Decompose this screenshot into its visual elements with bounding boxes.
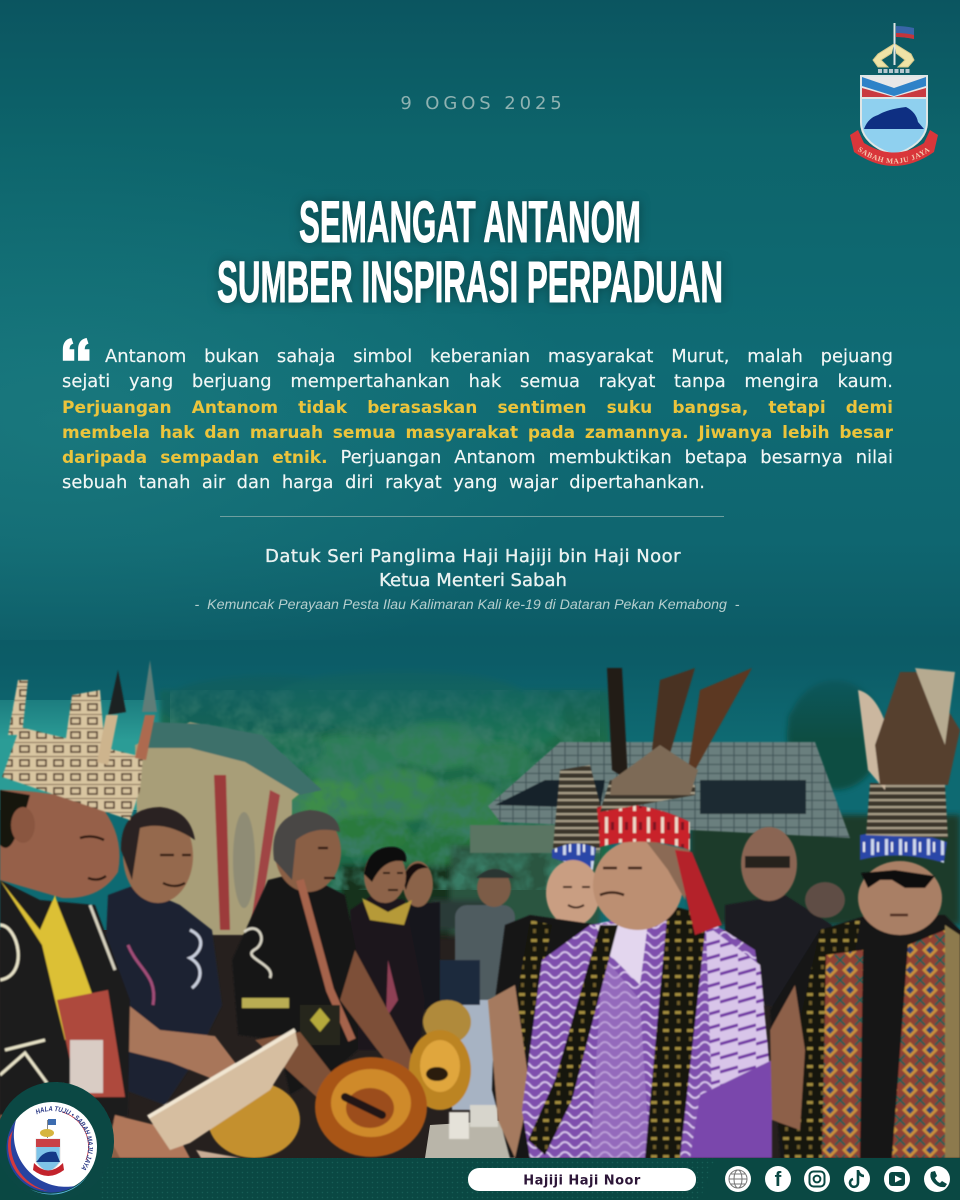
attribution: Ketua Menteri Sabah (379, 570, 567, 591)
quote text (62, 346, 893, 493)
social icons (725, 1166, 950, 1192)
gold gong right (409, 1030, 471, 1110)
icon: facebook: f (775, 1169, 782, 1191)
flag (894, 23, 914, 65)
attribution: - Kemuncak Perayaan Pesta Ilau Kalimaran Kali ke-19 di Dataran Pekan Kemabong - (195, 597, 739, 613)
Sabah crest (850, 23, 938, 166)
bald man in shades (725, 827, 832, 1010)
musician one with woven crown (0, 790, 190, 1158)
name pill: Hajiji Haji Noor (523, 1174, 641, 1188)
background glow (0, 0, 960, 640)
musician two (105, 807, 237, 1105)
wreath (878, 69, 910, 73)
people on the right (488, 668, 960, 1158)
icon: phone (924, 1166, 950, 1192)
attribution (195, 546, 740, 613)
right man with feather headdress (770, 668, 960, 1158)
big orange gong (315, 1057, 427, 1157)
icon: youtube (884, 1166, 910, 1192)
leafy mottling (170, 690, 600, 890)
musician five (398, 861, 440, 1010)
quote text: membela hak dan maruah semua masyarakat pada zamannya. Jiwanya lebih besar (62, 423, 893, 443)
chief minister (522, 668, 772, 1158)
date: 9 OGOS 2025 (400, 93, 566, 114)
icon: globe (725, 1166, 751, 1192)
woven crown (2, 660, 157, 820)
circular emblem badge (0, 1082, 114, 1194)
rear gong under basket (208, 1082, 300, 1158)
musician three (232, 810, 420, 1105)
quote text: sejati yang berjuang mempertahankan hak semua rakyat tanpa mengira kaum. (62, 371, 893, 392)
icon: tiktok (844, 1166, 870, 1192)
tent behind the musicians (135, 722, 322, 935)
woven tray (148, 1030, 298, 1158)
footer bar (0, 1158, 960, 1200)
quote text: sebuah tanah air dan harga diri rakyat yang wajar dipertahankan. (62, 472, 705, 493)
quote mark (62, 338, 90, 361)
motto ribbon: SABAH MAJU JAYA (858, 147, 930, 164)
motto ribbon (850, 130, 938, 166)
photographer at back (440, 869, 515, 1139)
badge crest (33, 1119, 64, 1176)
fade of photo into the teal background (0, 640, 960, 740)
shield (861, 76, 927, 155)
man background (805, 882, 845, 918)
title (215, 190, 726, 315)
quote text: Antanom bukan sahaja simbol keberanian masyarakat Murut, malah pejuang (105, 346, 893, 367)
musician four (350, 847, 425, 1050)
badge ring text: HALA TUJU • SABAH MAJU JAYA (36, 1106, 93, 1170)
gong rear (423, 1000, 471, 1044)
title: SEMANGAT ANTANOM (299, 190, 641, 255)
quote text: Perjuangan Antanom tidak berasaskan sentimen suku bangsa, tetapi demi (62, 398, 893, 418)
forest and sky background (0, 640, 960, 1160)
divider (220, 516, 724, 517)
people on the left (0, 660, 515, 1158)
icon: facebook (765, 1166, 791, 1192)
quote text: daripada sempadan etnik. Perjuangan Antanom membuktikan betapa besarnya nilai (62, 447, 893, 468)
name pill (468, 1168, 696, 1191)
woman in blue band (488, 765, 603, 1158)
icon: instagram (804, 1166, 830, 1192)
longhouse roof (470, 742, 850, 853)
hands holding the flag (873, 44, 914, 67)
attribution: Datuk Seri Panglima Haji Hajiji bin Haji Noor (265, 546, 681, 567)
